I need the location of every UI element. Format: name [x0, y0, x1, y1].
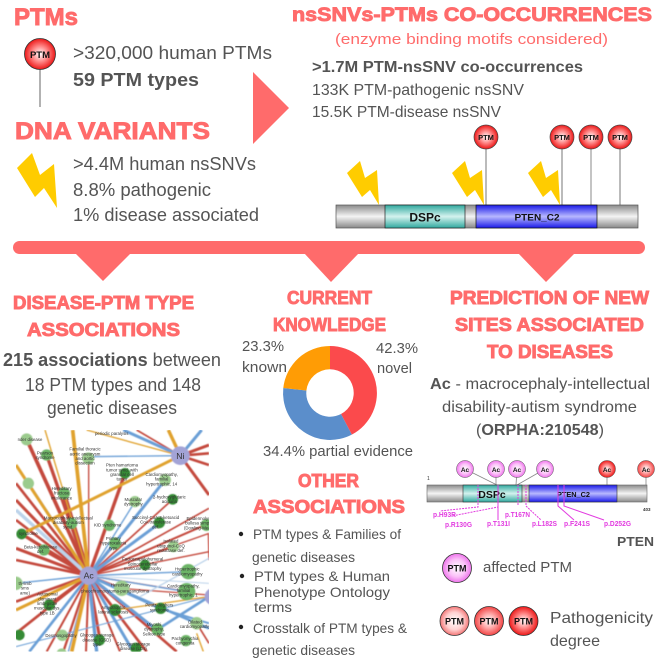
- network graph: disease-PTM associations: dissection: [75, 461, 95, 466]
- diagram: PTEN protein with mutations: p.D252G: [604, 519, 631, 528]
- network graph: disease-PTM associations: syndrome: [35, 455, 55, 460]
- network graph: disease-PTM associations: cardiomyopathy: [172, 571, 203, 576]
- bar: divider with three down arrows: [13, 241, 645, 282]
- network graph: disease-PTM associations: Miyoshi: [147, 622, 161, 627]
- diagram: PTEN protein with mutations: Ac: [603, 467, 612, 474]
- diagram: PTEN protein with mutations: p.F241S: [564, 519, 590, 528]
- diagram: PTEN protein with mutations: Ac: [492, 467, 501, 474]
- legend: affected PTM: affected PTM: [483, 559, 572, 576]
- network graph: disease-PTM associations: Hereditary: [111, 583, 131, 588]
- icon: PTM pin: [24, 38, 56, 107]
- diagram: PTEN protein with mutations: 403: [643, 507, 651, 512]
- labels: donut percentages: 23.3%: [242, 338, 284, 355]
- text: association summary: 215 associations between: [3, 350, 221, 370]
- network graph: disease-PTM associations: fructose: [54, 491, 70, 496]
- list: other associations: [239, 526, 408, 658]
- list: other associations: genetic diseases: [252, 549, 355, 565]
- list: other associations: PTM types & Families of: [253, 526, 401, 542]
- heading: co-occurrences: nsSNVs-PTMs CO-OCCURRENCES: [292, 4, 652, 26]
- text: co-occurrence statistics: 15.5K PTM-disease nsSNV: [312, 104, 501, 121]
- list: other associations: Crosstalk of PTM types &: [253, 620, 408, 636]
- labels: donut percentages: [242, 338, 418, 460]
- text: PTM statistics: >320,000 human PTMs: [73, 43, 272, 63]
- heading: prediction of new sites: [450, 288, 649, 362]
- network graph: disease-PTM associations: type: [93, 642, 101, 647]
- network graph: disease-PTM associations: aciduria: [162, 499, 177, 504]
- network graph: disease-PTM associations: Beta-ketothiolase: [24, 544, 57, 549]
- heading: other associations: [253, 471, 405, 517]
- network graph: disease-PTM associations: Hypertrophic: [175, 567, 200, 572]
- diagram: PTEN protein with mutations: Ac: [541, 467, 550, 474]
- network graph: disease-PTM associations: periodic paralysis: [95, 431, 128, 436]
- network graph: disease-PTM associations: Facioscapulohumeral: [122, 557, 163, 562]
- network graph: disease-PTM associations: congenita: [176, 641, 195, 646]
- network graph: disease-PTM associations: Amyotrophic: [101, 605, 125, 610]
- diagram: PTEN protein with mutations: Ac: [461, 467, 470, 474]
- heading: prediction of new sites: PREDICTION OF NEW: [450, 288, 649, 308]
- network graph: disease-PTM associations: syndrome: [19, 531, 38, 536]
- network graph: disease-PTM associations: Cardiomyopathy,: [167, 583, 200, 588]
- network graph: disease-PTM associations: Pachyonychia: [172, 636, 198, 641]
- network graph: disease-PTM associations: tumor synd. with: [106, 467, 138, 472]
- text: variant statistics: 8.8% pathogenic: [73, 180, 211, 200]
- label: PTEN: PTEN: [617, 534, 654, 549]
- network graph: disease-PTM associations: Dilated: [188, 619, 202, 624]
- diagram: PTEN protein with mutations: p.R130G: [445, 520, 472, 529]
- heading: prediction of new sites: TO DISEASES: [487, 342, 613, 362]
- network graph: disease-PTM associations: reductase def.: [157, 548, 185, 553]
- legend: pathogenicity degree: Pathogenicity: [550, 610, 653, 627]
- network graph: disease-PTM associations: dominant: [38, 596, 57, 601]
- network graph: disease-PTM associations: Hereditary: [52, 486, 72, 491]
- network graph: disease-PTM associations: nder disease: [18, 437, 43, 442]
- text: Ac syndrome description: (ORPHA:210548): [476, 422, 604, 439]
- icon: PTM pin: PTM: [30, 50, 50, 61]
- diagram: protein domains with PTMs and variants: [336, 125, 638, 228]
- legend: pathogenicity degree: PTM: [514, 616, 533, 626]
- network graph: disease-PTM associations: ubiquinol-CoQ: [157, 543, 185, 548]
- text: variant statistics: 1% disease associated: [73, 205, 259, 225]
- legend: affected PTM: [442, 554, 572, 582]
- network graph: disease-PTM associations: def.: [37, 549, 44, 554]
- network graph: disease-PTM associations: CoA transferase: [140, 520, 172, 525]
- donut chart: knowledge breakdown: [283, 346, 377, 440]
- diagram: protein domains with PTMs and variants: PTM: [583, 133, 599, 142]
- network graph: disease-PTM associations: [16, 430, 209, 652]
- heading: other associations: ASSOCIATIONS: [253, 497, 405, 517]
- diagram: PTEN protein with mutations: p.T167N: [505, 510, 530, 519]
- legend: pathogenicity degree: [440, 606, 653, 650]
- text: co-occurrence statistics: 133K PTM-pathogenic nsSNV: [312, 82, 524, 99]
- heading: disease-PTM type associations: ASSOCIATIONS: [27, 320, 180, 340]
- diagram: PTEN protein with mutations: Ac: [642, 467, 651, 474]
- network graph: disease-PTM associations: and aortic: [75, 456, 95, 461]
- network graph: disease-PTM associations: disability-autism: [53, 520, 84, 525]
- network graph: disease-PTM associations: Familial thoracic: [69, 447, 101, 452]
- heading: prediction of new sites: SITES ASSOCIATED: [455, 315, 644, 335]
- network graph: disease-PTM associations: Succinyl-CoA:3-ketoacid: [132, 515, 179, 520]
- text: PTM statistics: [73, 43, 272, 90]
- text: Ac syndrome description: [430, 376, 650, 439]
- network graph: disease-PTM associations: Primary: [106, 536, 121, 541]
- text: variant statistics: [73, 154, 259, 225]
- legend: pathogenicity degree: degree: [550, 633, 600, 650]
- network graph: disease-PTM associations: muscular dystrophy: [124, 566, 162, 571]
- text: Ac syndrome description: Ac - macrocephaly-intellectual: [430, 376, 650, 393]
- network graph: disease-PTM associations: intolerance: [51, 495, 73, 500]
- network graph: disease-PTM associations: pheochromocytoma-paraganglioma: [81, 588, 150, 593]
- heading: disease-PTM type associations: DISEASE-PTM TYPE: [13, 293, 194, 313]
- heading: DNA variants: DNA VARIANTS: [15, 118, 210, 145]
- network graph: disease-PTM associations: dystrophy: [124, 502, 144, 507]
- arrow: right triangle: [253, 72, 289, 144]
- network graph: disease-PTM associations: hypertrophic, 1: [169, 593, 198, 598]
- network graph: disease-PTM associations: ame): [20, 590, 30, 595]
- diagram: protein domains with PTMs and variants: PTEN_C2: [514, 212, 560, 222]
- labels: donut percentages: 34.4% partial evidence: [263, 443, 413, 460]
- legend: affected PTM: PTM: [448, 564, 466, 574]
- network graph: disease-PTM associations: synd.: [63, 525, 74, 530]
- diagram: PTEN protein with mutations: p.H93R: [433, 510, 457, 519]
- network graph: disease-PTM associations: Peutz-Jeghers: [145, 603, 173, 608]
- subtitle: enzyme binding motifs: (enzyme binding motifs considered): [335, 31, 608, 48]
- network graph: disease-PTM associations: Glycogen storage: [80, 633, 114, 638]
- legend: pathogenicity degree: PTM: [480, 616, 498, 626]
- labels: donut percentages: known: [242, 359, 287, 376]
- text: co-occurrence statistics: >1.7M PTM-nsSNV co-occurrences: [312, 59, 583, 76]
- diagram: protein domains with PTMs and variants: DSPc: [409, 210, 441, 224]
- text: co-occurrence statistics: [312, 59, 583, 121]
- network graph: disease-PTM associations: hyperoxaluria: [100, 541, 127, 546]
- network graph: disease-PTM associations: Autosomal: [37, 592, 58, 597]
- heading: PTMs: PTMs: [14, 4, 78, 31]
- legend: pathogenicity degree: PTM: [445, 616, 464, 626]
- network graph: disease-PTM associations: bullosa simplex: [185, 521, 216, 526]
- text: variant statistics: >4.4M human nsSNVs: [73, 154, 256, 174]
- heading: other associations: OTHER: [298, 471, 359, 491]
- network graph: disease-PTM associations: dystrophy,: [144, 627, 164, 632]
- text: PTM statistics: 59 PTM types: [73, 70, 199, 90]
- network graph: disease-PTM associations: disease (GSD): [82, 637, 111, 642]
- heading: current knowledge: CURRENT: [287, 288, 372, 308]
- diagram: PTEN protein with mutations: Ac: [513, 467, 522, 474]
- network graph: disease-PTM associations: type 1B: [40, 610, 55, 615]
- network graph: disease-PTM associations: Cardiomyopathy,: [145, 472, 178, 477]
- text: association summary: 18 PTM types and 148: [25, 375, 201, 395]
- network graph: disease-PTM associations: aortic aneurysm: [70, 451, 101, 456]
- heading: disease-PTM type associations: [13, 293, 194, 340]
- network graph: disease-PTM associations: tumor: [116, 477, 128, 482]
- network graph: disease-PTM associations: Muscular: [125, 497, 142, 502]
- network graph: disease-PTM associations: Epidermolysis: [187, 516, 213, 521]
- network graph: disease-PTM associations: familial: [177, 588, 190, 593]
- diagram: PTEN protein with mutations: DSPc: [478, 489, 506, 501]
- network graph: disease-PTM associations: Macrocephaly-intellectual: [44, 515, 93, 520]
- network graph: disease-PTM associations: Pten hamartoma: [106, 463, 138, 468]
- network graph: disease-PTM associations: Ni: [176, 451, 184, 461]
- list: other associations: PTM types & Human: [254, 568, 390, 584]
- network graph: disease-PTM associations: sms: [21, 586, 29, 591]
- network graph: disease-PTM associations: type: [109, 545, 118, 550]
- network graph: disease-PTM associations: syndrome: [150, 607, 169, 612]
- network graph: disease-PTM associations: muscular dys.: [34, 606, 61, 611]
- network graph: disease-PTM associations: Ac: [84, 571, 94, 581]
- network graph: disease-PTM associations: def.: [152, 524, 159, 529]
- heading: current knowledge: [273, 288, 386, 335]
- labels: donut percentages: novel: [377, 360, 412, 377]
- network graph: disease-PTM associations: limb-girdle: [37, 601, 58, 606]
- network graph: disease-PTM associations: hypertrophic, 14: [146, 481, 178, 486]
- diagram: protein domains with PTMs and variants: PTM: [612, 133, 628, 142]
- list: other associations: Phenotype Ontology: [254, 584, 390, 600]
- network graph: disease-PTM associations: isolated: [164, 539, 178, 544]
- network graph: disease-PTM associations: granular cell: [110, 472, 134, 477]
- diagram: protein domains with PTMs and variants: PTM: [554, 133, 570, 142]
- network graph: disease-PTM associations: cardiomyopathy: [180, 624, 211, 629]
- labels: donut percentages: 42.3%: [376, 340, 418, 357]
- network graph: disease-PTM associations: familial: [155, 477, 168, 482]
- network graph: disease-PTM associations: KID syndrome: [94, 523, 122, 528]
- diagram: protein domains with PTMs and variants: PTM: [478, 133, 494, 142]
- network graph: disease-PTM associations: Desmosgopathy: [45, 633, 77, 638]
- list: other associations: genetic diseases: [252, 642, 355, 658]
- list: other associations: terms: [254, 599, 292, 615]
- network graph: disease-PTM associations: Pearson: [37, 450, 53, 455]
- network graph: disease-PTM associations: Spinocerebellar: [128, 561, 158, 566]
- network graph: disease-PTM associations: Selkoe type: [143, 631, 166, 636]
- network graph: disease-PTM associations: 2-hydroxyglutaric: [153, 494, 186, 499]
- text: Ac syndrome description: disability-autism syndrome: [442, 399, 637, 416]
- network graph: disease-PTM associations: th-limb: [18, 581, 31, 586]
- network graph: disease-PTM associations: disease (LDs): [120, 646, 147, 651]
- diagram: PTEN protein with mutations: [427, 460, 654, 529]
- text: association summary: genetic diseases: [47, 398, 177, 418]
- diagram: PTEN protein with mutations: p.T131I: [487, 519, 510, 528]
- network graph: disease-PTM associations: Glycogen storage: [116, 641, 150, 646]
- diagram: PTEN protein with mutations: p.L182S: [532, 519, 557, 528]
- text: association summary: [3, 350, 221, 418]
- network graph: disease-PTM associations: lateral sclerosis: [98, 610, 128, 615]
- icon: lightning bolt: [17, 153, 57, 208]
- diagram: PTEN protein with mutations: PTEN_C2: [557, 490, 590, 499]
- network graph: disease-PTM associations: (Dowling-Meara): [184, 525, 217, 530]
- heading: current knowledge: KNOWLEDGE: [273, 315, 386, 335]
- diagram: PTEN protein with mutations: 1: [427, 476, 430, 482]
